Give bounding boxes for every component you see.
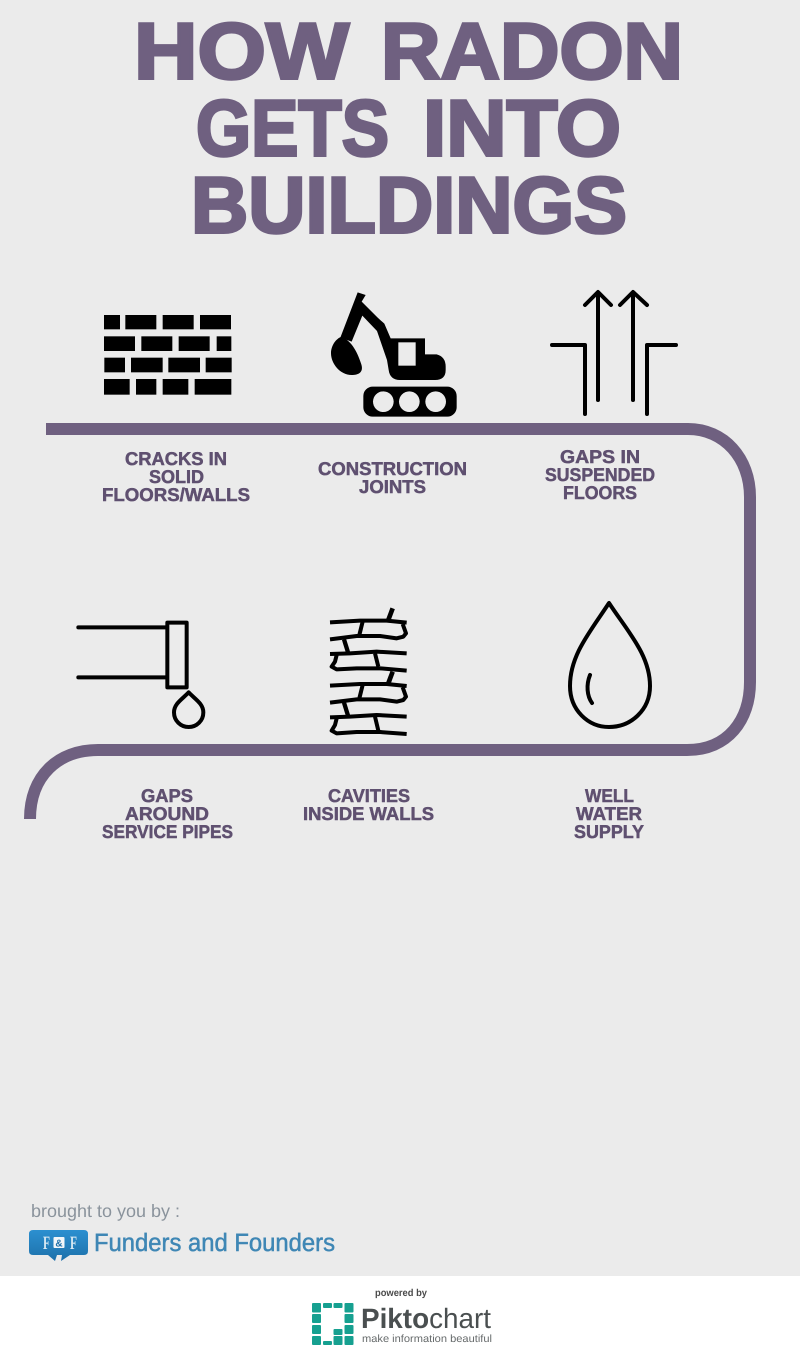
label: cracks in solid floors/walls (102, 448, 250, 505)
label: well water supply: SUPPLY (574, 821, 645, 842)
title: HOW (134, 6, 349, 96)
footer band (0, 1276, 800, 1356)
label: cracks in solid floors/walls: CRACKS IN (125, 448, 227, 469)
icon: water drop (570, 603, 650, 727)
title: INTO (423, 84, 621, 172)
winding path line (30, 429, 750, 819)
icon: Piktochart logo (312, 1303, 354, 1345)
label: cracks in solid floors/walls: FLOORS/WALLS (102, 484, 250, 505)
label: well water supply (574, 785, 645, 842)
label: cavities inside walls: INSIDE WALLS (303, 803, 434, 824)
label: gaps around service pipes: AROUND (125, 803, 209, 824)
label: gaps in suspended floors (545, 446, 655, 503)
label: gaps in suspended floors: GAPS IN (560, 446, 640, 467)
icon: wall cavities (330, 608, 407, 734)
icon: F and F speech bubbles: & (55, 1238, 63, 1250)
logo: Funders and Founders (29, 1229, 335, 1261)
icon: F and F speech bubbles (29, 1230, 88, 1261)
label: cavities inside walls (303, 785, 434, 824)
label: cavities inside walls: CAVITIES (328, 785, 410, 806)
brought to you by text: brought to you by : (31, 1201, 180, 1221)
title (134, 6, 683, 250)
title: BUILDINGS (191, 160, 627, 250)
Piktochart wordmark: Piktochart (361, 1303, 491, 1334)
label: gaps around service pipes (102, 785, 233, 842)
title: GETS (196, 84, 389, 172)
label: construction joints (318, 458, 467, 497)
icon: leaking pipe (78, 623, 203, 727)
powered by text: powered by (375, 1288, 427, 1299)
icon: brick wall (104, 315, 232, 395)
tagline: make information beautiful (362, 1333, 492, 1345)
label: cracks in solid floors/walls: SOLID (149, 466, 204, 487)
label: gaps in suspended floors: FLOORS (563, 482, 637, 503)
label: gaps around service pipes: SERVICE PIPES (102, 821, 233, 842)
icon: F and F speech bubbles: F (43, 1233, 50, 1254)
icon: F and F speech bubbles: F (70, 1233, 77, 1254)
label: gaps in suspended floors: SUSPENDED (545, 464, 655, 485)
logo: Funders and Founders: Funders and Founders (94, 1229, 335, 1257)
label: well water supply: WATER (576, 803, 642, 824)
label: gaps around service pipes: GAPS (141, 785, 193, 806)
label: construction joints: JOINTS (359, 476, 426, 497)
label: construction joints: CONSTRUCTION (318, 458, 467, 479)
icon: upward arrows through floor gap (552, 292, 676, 414)
label: well water supply: WELL (585, 785, 634, 806)
icon: excavator (331, 292, 457, 417)
title: RADON (381, 6, 683, 96)
